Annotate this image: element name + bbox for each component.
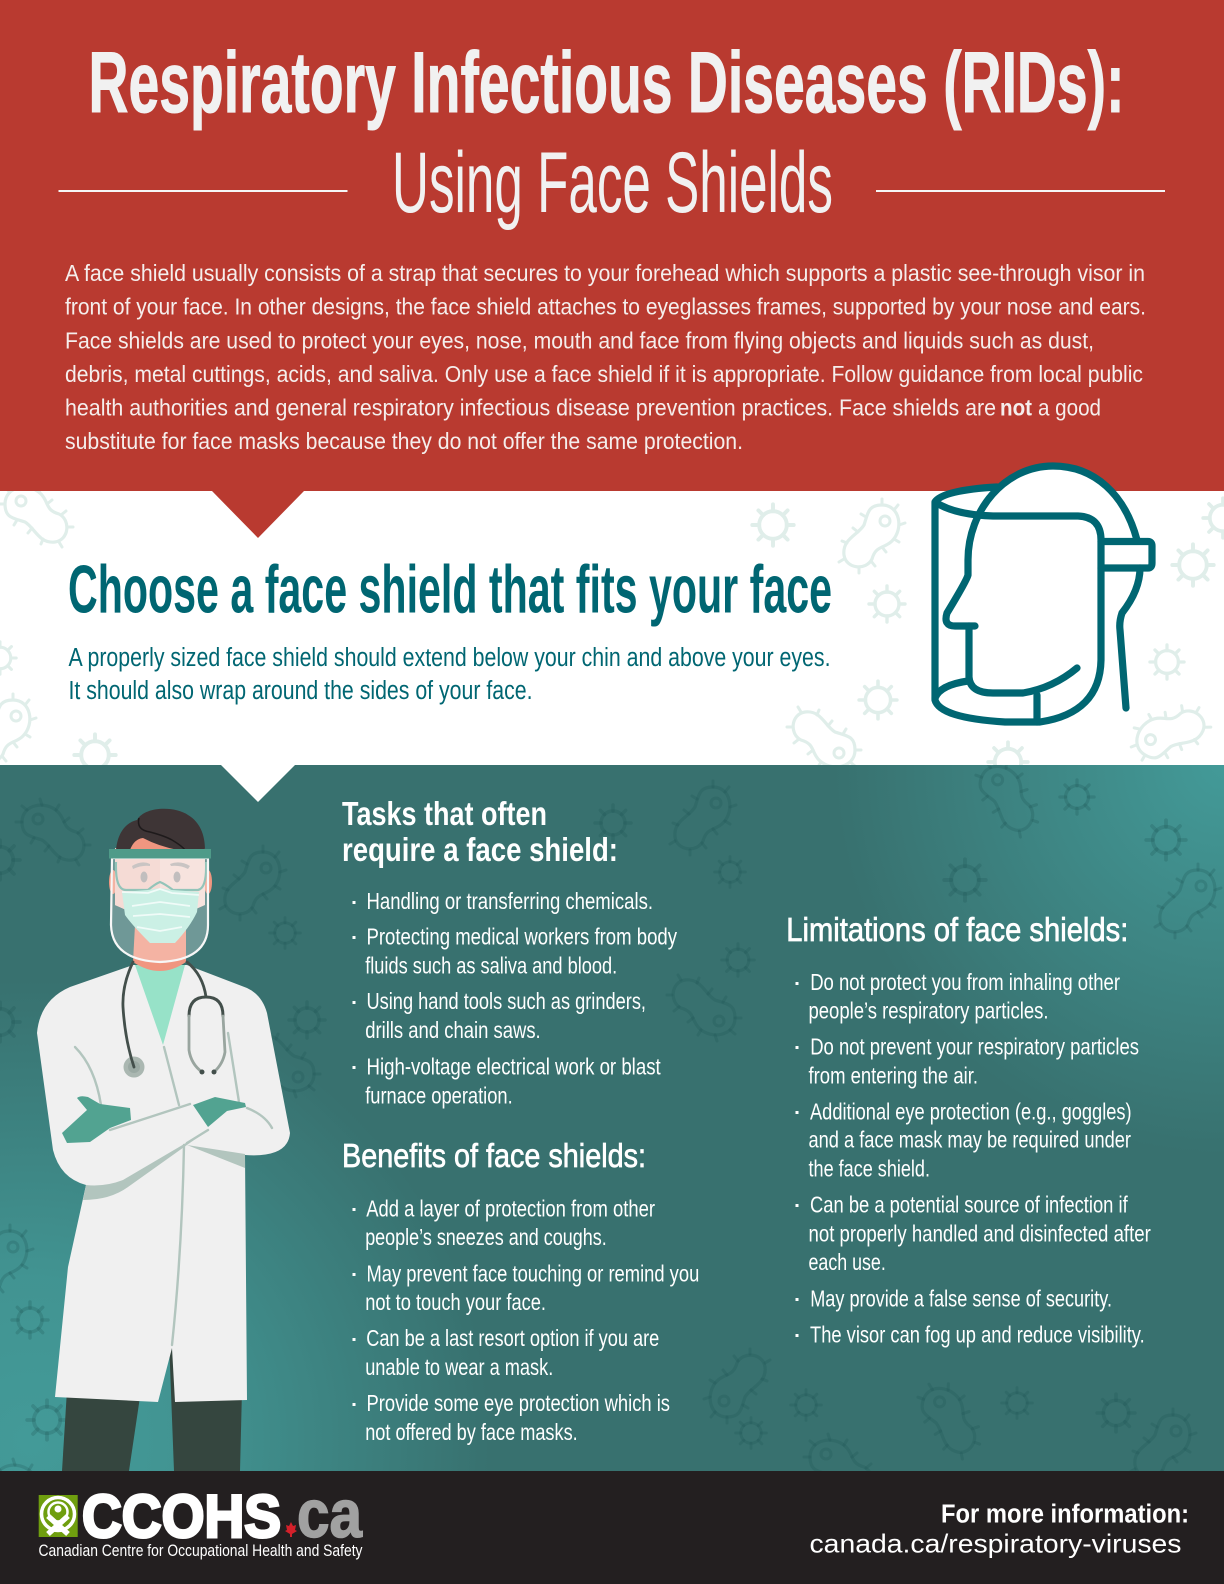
clear visor — [111, 858, 208, 962]
lab coat — [37, 965, 290, 1402]
limitations list: each use. — [808, 1249, 886, 1275]
benefits list: unable to wear a mask. — [365, 1354, 553, 1380]
intro paragraph — [65, 260, 1146, 454]
limitations list: people’s respiratory particles. — [808, 997, 1048, 1023]
surgical mask — [122, 888, 199, 943]
limitations list: Additional eye protection (e.g., goggles) — [810, 1098, 1132, 1124]
task list: drills and chain saws. — [365, 1017, 541, 1043]
gloves — [62, 1096, 246, 1143]
limitations list: The visor can fog up and reduce visibility. — [810, 1321, 1145, 1347]
benefits list: not offered by face masks. — [365, 1419, 578, 1445]
logo: .ca: ca — [297, 1476, 363, 1552]
text block: benefits — [342, 1137, 699, 1445]
limitations list: the face shield. — [808, 1156, 930, 1182]
text block: limitations — [786, 911, 1151, 1347]
white section background — [0, 491, 1224, 765]
limitations list: Do not protect you from inhaling other — [810, 969, 1120, 995]
limitations list: Do not prevent your respiratory particles — [810, 1034, 1139, 1060]
heading: limitations: Limitations of face shields: — [786, 911, 1128, 948]
benefits list: Provide some eye protection which is — [366, 1390, 670, 1416]
icon: face shield on head profile — [935, 466, 1152, 722]
icon: maple leaf — [285, 1522, 297, 1537]
coat shadows — [83, 1130, 245, 1200]
limitations list: Can be a potential source of infection if — [810, 1192, 1128, 1218]
hair — [116, 809, 205, 850]
more information url: canada.ca/respiratory-viruses — [810, 1529, 1182, 1559]
visor headband — [109, 849, 211, 858]
panel: footer — [0, 1471, 1224, 1584]
intro paragraph: debris, metal cuttings, acids, and saliva. Only use a face shield if it is appropriate. Follow guidance from local public — [65, 361, 1143, 387]
illustration: doctor wearing face shield — [37, 809, 290, 1471]
panel: red header — [0, 0, 1224, 538]
panel: teal lower section — [0, 765, 1224, 1471]
heading: tasks: Tasks that often — [342, 795, 547, 832]
benefits list: not to touch your face. — [365, 1289, 546, 1315]
heading: benefits: Benefits of face shields: — [342, 1137, 646, 1174]
intro paragraph: substitute for face masks because they do not offer the same protection. — [65, 428, 743, 454]
limitations list: and a face mask may be required under — [808, 1127, 1131, 1153]
heading: tasks: require a face shield: — [342, 831, 618, 868]
background germ pattern: white section — [0, 481, 1224, 782]
task list — [352, 888, 677, 1108]
intro paragraph: a good — [1038, 394, 1101, 420]
more information heading: For more information: — [941, 1501, 1189, 1529]
intro paragraph: Face shields are used to protect your eyes, nose, mouth and face from flying objects and liquids such as dust, — [65, 327, 1094, 353]
ears — [109, 870, 212, 894]
task list: High-voltage electrical work or blast — [366, 1053, 661, 1079]
logo: CCOHS emblem — [39, 1495, 78, 1537]
goggles — [116, 862, 206, 890]
intro paragraph: front of your face. In other designs, the face shield attaches to eyeglasses frames, supported by your nose and ears. — [65, 293, 1146, 319]
task list: Protecting medical workers from body — [366, 923, 677, 949]
logo: CCOHS wordmark: CCOHS — [82, 1483, 281, 1550]
limitations list — [796, 969, 1151, 1347]
text block: tasks that require a shield — [342, 795, 677, 1108]
face — [115, 848, 205, 925]
intro paragraph: A face shield usually consists of a strap that secures to your forehead which supports a plastic see-through visor in — [65, 260, 1145, 286]
task list: Using hand tools such as grinders, — [366, 988, 646, 1014]
scrub top — [135, 965, 185, 1045]
heading: tasks — [342, 795, 618, 868]
limitations list: not properly handled and disinfected after — [808, 1221, 1151, 1247]
task list: Handling or transferring chemicals. — [366, 888, 653, 914]
subtitle: Using Face Shields — [392, 135, 833, 231]
benefits list — [352, 1196, 699, 1445]
text block: fit guidance: A properly sized face shield should extend below your chin and above your eyes. — [68, 644, 830, 672]
benefits list: people’s sneezes and coughs. — [365, 1224, 607, 1250]
intro paragraph: health authorities and general respiratory infectious disease prevention practices. Face shields are — [65, 394, 996, 420]
limitations list: May provide a false sense of security. — [810, 1286, 1112, 1312]
logo tagline: Canadian Centre for Occupational Health and Safety — [38, 1541, 363, 1560]
coat seam lines — [75, 1033, 272, 1345]
task list: furnace operation. — [365, 1082, 513, 1108]
eyes and brows — [132, 862, 190, 882]
background germ pattern: teal section — [0, 754, 1221, 1525]
text block: fit guidance — [68, 644, 830, 705]
task list: fluids such as saliva and blood. — [365, 952, 617, 978]
neck — [133, 925, 186, 971]
stethoscope — [123, 962, 225, 1078]
benefits list: Add a layer of protection from other — [366, 1196, 655, 1222]
limitations list: from entering the air. — [808, 1062, 978, 1088]
benefits list: Can be a last resort option if you are — [366, 1325, 659, 1351]
text block: fit guidance: It should also wrap around the sides of your face. — [68, 677, 532, 705]
benefits list: May prevent face touching or remind you — [366, 1261, 699, 1287]
intro paragraph: not — [1000, 394, 1032, 420]
trousers — [62, 1340, 242, 1471]
